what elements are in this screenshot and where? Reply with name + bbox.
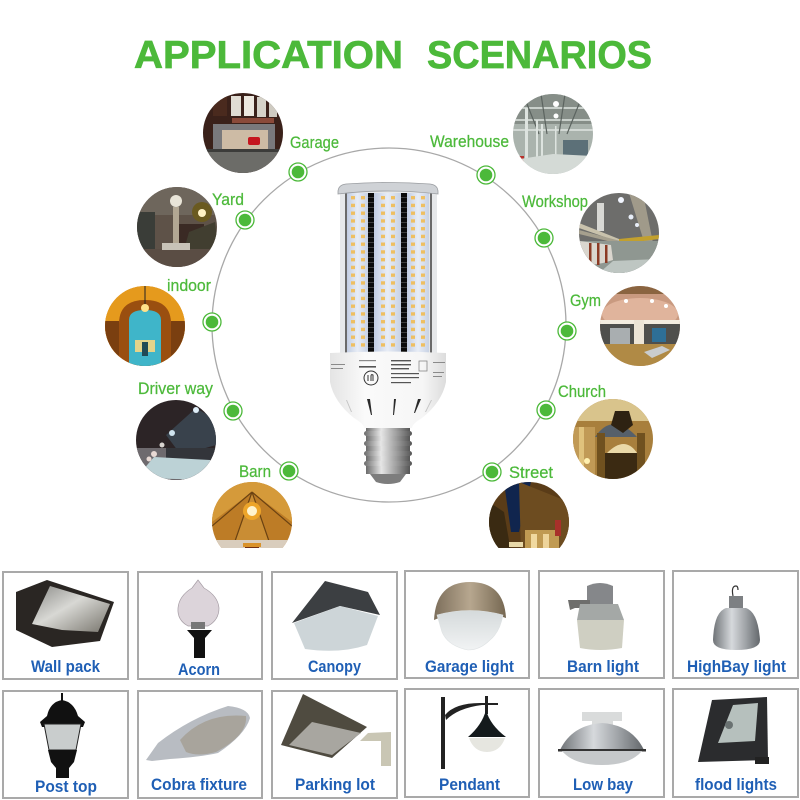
card: Cobra fixture (138, 691, 262, 798)
card: HighBay light (673, 571, 798, 678)
top cap (338, 182, 438, 194)
card: Canopy (272, 572, 397, 679)
node: Gym (558, 322, 576, 340)
icon: post top lamp (40, 693, 85, 778)
caption: Garage light (425, 657, 514, 676)
photo: Workshop (579, 193, 659, 273)
LED rows (350, 195, 365, 350)
label: Workshop: Workshop (522, 192, 588, 211)
E39 screw base (366, 428, 410, 474)
photo: Church (573, 399, 653, 479)
card: Barn light (539, 571, 664, 678)
node: Driver way (224, 402, 242, 420)
node: Yard (236, 211, 254, 229)
node: Garage (289, 163, 307, 181)
caption: Post top (35, 777, 97, 796)
icon: parking lot fixture (281, 694, 391, 766)
caption: HighBay light (687, 657, 786, 676)
icon: wall pack (16, 580, 114, 647)
icon: garage light (434, 582, 506, 650)
driver housing (330, 352, 446, 428)
photo: Warehouse (513, 94, 593, 174)
card: Wall pack (3, 572, 128, 679)
label: indoor: indoor (167, 276, 211, 295)
label: Warehouse: Warehouse (430, 132, 509, 151)
LED corn bulb (330, 182, 446, 484)
caption: Cobra fixture (151, 775, 247, 794)
label: Garage: Garage (290, 133, 339, 152)
title (134, 34, 652, 77)
caption: Acorn (178, 660, 220, 679)
node: Warehouse (477, 166, 495, 184)
icon: acorn lamp (178, 580, 219, 658)
caption: flood lights (695, 775, 777, 794)
caption: Pendant (439, 775, 500, 794)
title: SCENARIOS (427, 34, 652, 77)
label: Barn: Barn (239, 462, 271, 481)
photo: Barn (212, 482, 292, 548)
card: Acorn (138, 572, 262, 679)
card: flood lights (673, 689, 798, 797)
node: Street (483, 463, 501, 481)
node: Church (537, 401, 555, 419)
icon: canopy light (292, 581, 380, 651)
caption: Parking lot (295, 775, 375, 794)
label: Driver way: Driver way (138, 379, 213, 398)
card: Pendant (405, 689, 529, 797)
photo: Driver way (136, 400, 216, 480)
label: Yard: Yard (212, 190, 244, 209)
caption: Low bay (573, 775, 633, 794)
photo: Yard (137, 187, 219, 267)
label: Gym: Gym (570, 291, 601, 310)
label: Street: Street (509, 463, 553, 482)
icon: flood light (698, 697, 769, 764)
vents (367, 399, 421, 415)
icon: highbay light (713, 586, 760, 650)
icon: barn light (568, 583, 624, 650)
printed spec lines (331, 360, 445, 383)
caption: Wall pack (31, 657, 100, 676)
photo: Street (489, 482, 569, 548)
application ring (212, 148, 566, 502)
photo crop mask (200, 548, 600, 568)
node: Workshop (535, 229, 553, 247)
node: indoor (203, 313, 221, 331)
photo: indoor (105, 286, 185, 366)
label: Church: Church (558, 382, 606, 401)
node: Barn (280, 462, 298, 480)
UL mark (364, 371, 378, 385)
card: Parking lot (272, 691, 397, 798)
icon: pendant lamp (441, 696, 506, 769)
caption: Canopy (308, 657, 361, 676)
title: APPLICATION (134, 34, 403, 77)
icon: cobra head (146, 706, 250, 761)
photo: Garage (203, 93, 283, 173)
photo: Gym (600, 286, 680, 366)
caption: Barn light (567, 657, 639, 676)
bulb body (340, 190, 437, 354)
icon: low bay (558, 712, 646, 765)
card: Garage light (405, 571, 529, 678)
card: Post top (3, 691, 128, 798)
card: Low bay (539, 689, 664, 797)
